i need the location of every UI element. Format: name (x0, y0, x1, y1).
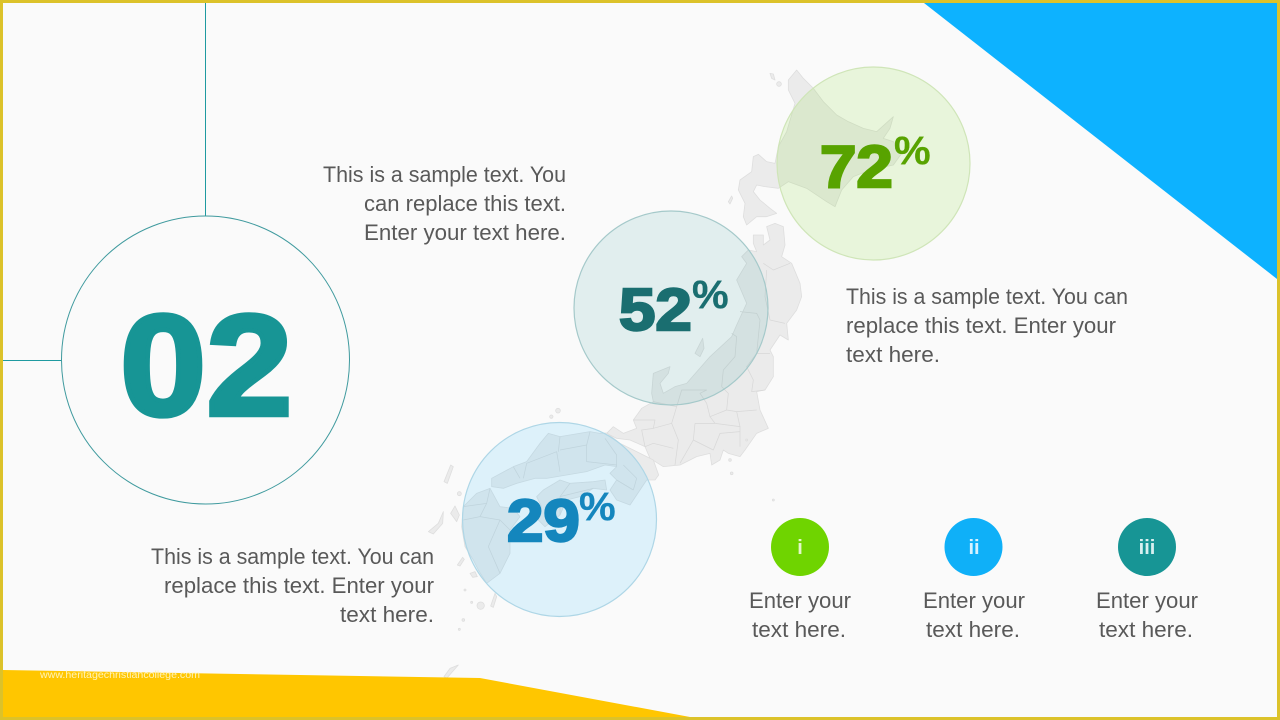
text block: right: replace this text. Enter your (846, 313, 1116, 338)
legend item ii: ii (968, 537, 980, 559)
horizontal connector (3, 360, 62, 362)
stat circle: 72% (777, 67, 970, 260)
Honshu north and central (607, 223, 802, 467)
legend item i (749, 518, 851, 642)
legend item i: i (797, 537, 803, 559)
stat circle: 29% (462, 422, 656, 616)
western Japan (428, 408, 774, 678)
stat circle: 52%: 52 (619, 278, 692, 343)
legend item ii (923, 518, 1025, 642)
text block: right: This is a sample text. You can (846, 284, 1128, 309)
text block: upper left: Enter your text here. (364, 220, 566, 245)
text block: lower left: replace this text. Enter your (164, 573, 434, 598)
section number badge: 02 (120, 285, 292, 446)
map of Japan (428, 70, 902, 678)
text block: upper left: This is a sample text. You (323, 162, 566, 187)
vertical connector (204, 3, 206, 216)
text block: right: text here. (846, 342, 940, 367)
stat circle: 72%: 72 (820, 135, 893, 200)
legend item iii: Enter your (1096, 588, 1198, 613)
text block: upper left: can replace this text. (364, 191, 566, 216)
text block: right (846, 284, 1128, 367)
legend item ii: Enter your (923, 588, 1025, 613)
legend item i: Enter your (749, 588, 851, 613)
legend item i: text here. (752, 617, 846, 642)
text block: lower left: This is a sample text. You can (151, 544, 434, 569)
text block: lower left (151, 544, 434, 627)
legend item iii: iii (1139, 537, 1155, 559)
stat circle: 52% (574, 211, 768, 405)
Hokkaido (728, 70, 902, 225)
watermark: www.heritagechristiancollege.com (39, 670, 200, 681)
text block: upper left (323, 162, 566, 245)
stat circle: 29%: 29 (507, 489, 580, 554)
stat circle: 29%: % (579, 484, 616, 529)
yellow bottom band (3, 670, 690, 717)
stat circle: 52%: % (692, 272, 729, 317)
legend item iii (1096, 518, 1198, 642)
blue corner triangle (924, 3, 1277, 279)
legend item iii: text here. (1099, 617, 1193, 642)
legend item ii: text here. (926, 617, 1020, 642)
text block: lower left: text here. (340, 602, 434, 627)
stat circle: 72%: % (894, 128, 931, 173)
section number badge (62, 216, 350, 504)
